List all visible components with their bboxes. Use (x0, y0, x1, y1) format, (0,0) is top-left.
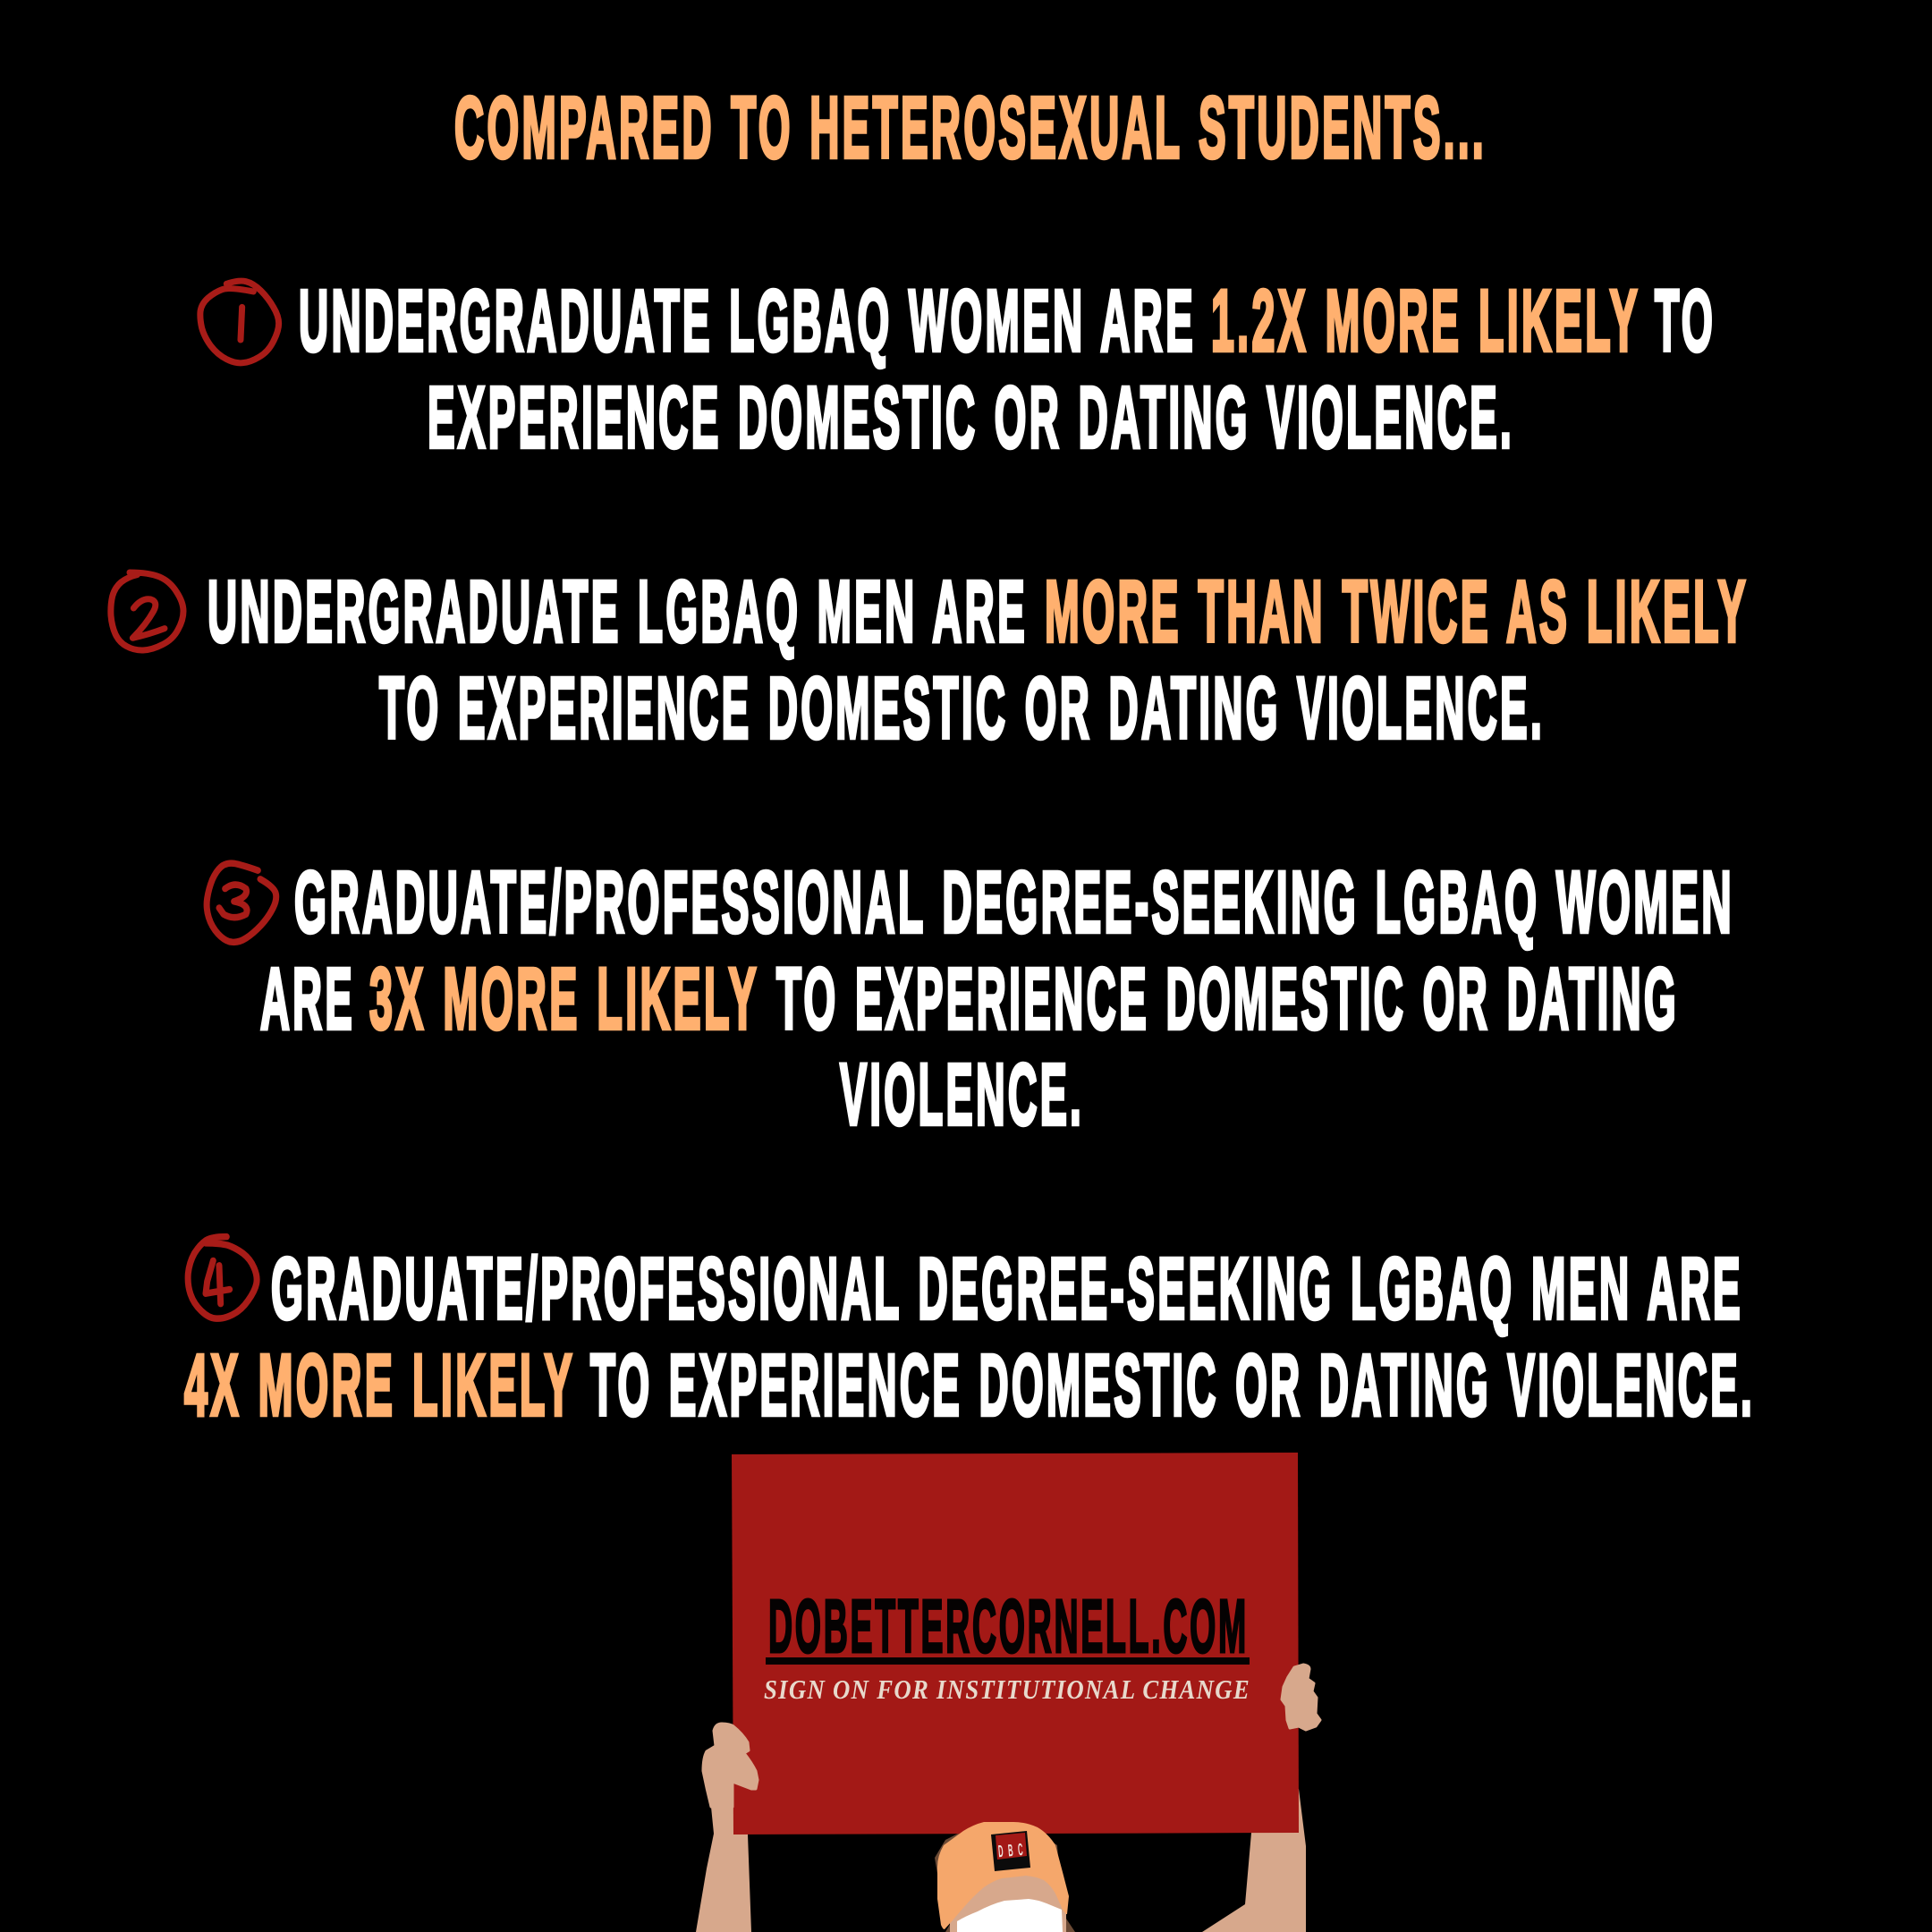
text block: statistic 1 (200, 272, 1716, 466)
icon: circled number 3 (207, 863, 276, 942)
badge red panel (996, 1833, 1027, 1860)
text: TO (1655, 272, 1716, 369)
sign (732, 1453, 1299, 1835)
hair (935, 1831, 1075, 1932)
cap (937, 1822, 1069, 1929)
face mask (957, 1899, 1063, 1932)
left arm (696, 1750, 751, 1932)
illustration: protester holding sign: DBC (997, 1840, 1029, 1861)
text block: statistic 4: 4X MORE LIKELY (184, 1336, 575, 1434)
text block: statistic 2: UNDERGRADUATE LGBAQ MEN ARE (208, 563, 1028, 660)
text block: statistic 3: ARE (260, 950, 355, 1047)
text block: statistic 3 (207, 853, 1734, 1143)
face (950, 1865, 1066, 1932)
text block: statistic 3: 3X MORE LIKELY (369, 950, 759, 1047)
icon: circled number 4 (188, 1237, 257, 1318)
left hand (703, 1724, 758, 1807)
text block: statistic 2 (111, 563, 1749, 757)
icon: circled number 1 (200, 281, 279, 363)
right arm (1202, 1789, 1306, 1932)
illustration: protester holding sign (696, 1453, 1320, 1932)
text block: statistic 3: VIOLENCE. (840, 1046, 1084, 1143)
icon: circled number 2 (111, 572, 183, 650)
cap badge (991, 1831, 1030, 1871)
sign tagline: SIGN ON FOR INSTITUTIONAL CHANGE (764, 1674, 1250, 1705)
sign board (732, 1453, 1299, 1835)
badge background (991, 1831, 1030, 1871)
right hand (1282, 1665, 1320, 1730)
sign url underline (766, 1657, 1250, 1665)
illustration: protester holding sign: DOBETTERCORNELL.COM (768, 1584, 1249, 1668)
text block: statistic 4 (184, 1237, 1755, 1434)
